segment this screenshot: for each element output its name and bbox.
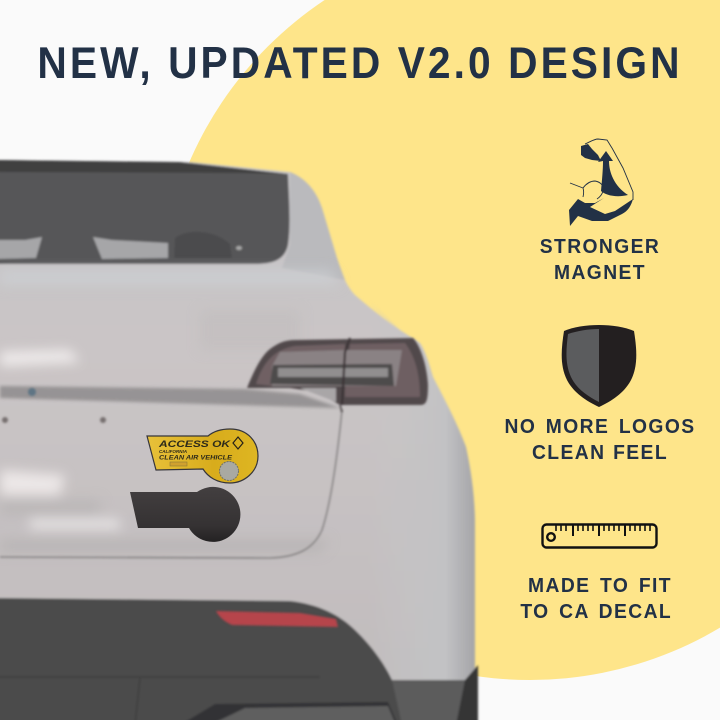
car body silhouette [0,160,475,720]
decal text: ACCESS OK [158,439,231,450]
emblem and plate holes [2,388,106,423]
tail light [247,338,428,412]
icon: shield [562,325,636,407]
text: made to fit to CA decal [520,574,672,622]
seal [220,462,238,480]
reflector [216,611,338,627]
diamond [233,437,243,449]
decal text: CALIFORNIA [159,449,188,455]
icon: flexed arm [569,138,634,226]
text: no more logos clean feel: CLEAN FEEL [532,440,668,464]
title: NEW, UPDATED V2.0 DESIGN [37,39,683,88]
decal text: CLEAN AIR VEHICLE [159,454,233,462]
text: stronger magnet [540,235,660,284]
text: made to fit to CA decal: TO CA DECAL [520,600,672,622]
body highlights [0,270,340,552]
trunk lip band [0,386,340,408]
rear seats in window [0,237,168,259]
text: no more logos clean feel: NO MORE LOGOS [505,415,695,438]
decal text [158,439,233,462]
lower bumper [0,598,478,720]
trunk panel outline [0,410,342,558]
text: made to fit to CA decal: MADE TO FIT [528,574,672,597]
text: stronger magnet: STRONGER [540,235,660,258]
icon: ruler [541,523,658,549]
rear window [0,160,290,264]
text: no more logos clean feel [505,415,695,464]
text: stronger magnet: MAGNET [554,260,646,284]
